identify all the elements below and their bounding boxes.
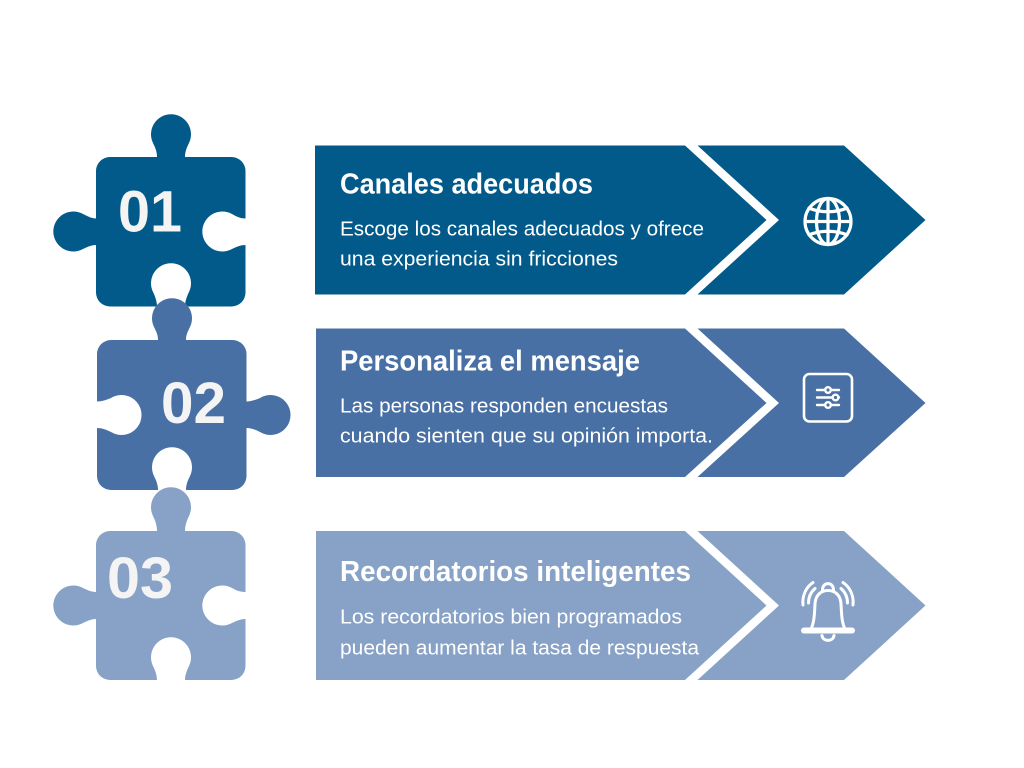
arrow body 2 <box>316 328 766 477</box>
heading 2: Personaliza el mensaje <box>340 346 640 378</box>
heading 3: Recordatorios inteligentes <box>340 556 691 588</box>
body text 1 <box>340 218 704 270</box>
body text 3: pueden aumentar la tasa de respuesta <box>340 638 700 660</box>
puzzle piece 02 <box>97 298 291 490</box>
number 01: 01 <box>118 180 182 244</box>
arrow head 1 <box>698 146 926 294</box>
arrow body 3 <box>316 531 766 680</box>
body text 1: Escoge los canales adecuados y ofrece <box>340 218 704 240</box>
icon: sliders <box>804 374 852 422</box>
panel: recordatorios inteligentes <box>316 531 926 680</box>
body text 2 <box>340 396 713 448</box>
panel: personaliza el mensaje <box>316 328 926 477</box>
arrow head 2 <box>698 328 926 477</box>
body text 3 <box>340 606 700 660</box>
body text 2: Las personas responden encuestas <box>340 396 668 418</box>
number 02: 02 <box>161 371 226 436</box>
heading 1: Canales adecuados <box>340 168 593 200</box>
panel: canales adecuados <box>315 146 926 294</box>
arrow body 1 <box>315 146 766 294</box>
puzzle piece 03 <box>53 487 246 680</box>
number 03: 03 <box>107 546 173 611</box>
puzzle piece 01 <box>53 114 246 306</box>
body text 1: una experiencia sin fricciones <box>340 248 618 270</box>
icon: globe <box>805 198 851 244</box>
body text 3: Los recordatorios bien programados <box>340 606 682 628</box>
body text 2: cuando sienten que su opinión importa. <box>340 426 713 448</box>
arrow head 3 <box>698 531 926 680</box>
icon: bell <box>803 582 853 640</box>
